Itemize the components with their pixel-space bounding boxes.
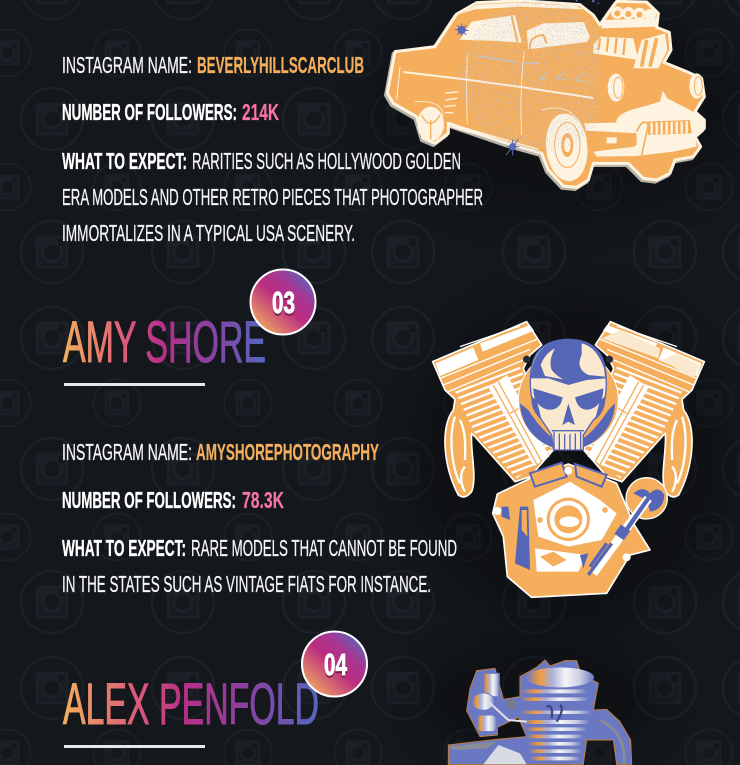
badge 04 [302,632,367,696]
what to expect: WHAT TO EXPECT: [62,148,187,174]
heading: amy shore: AMY SHORE [63,310,266,375]
engine rocker boxes [530,454,607,487]
what to expect [62,148,483,246]
carburettor [472,673,499,732]
section text: amyshorephotography [62,439,457,597]
chrome cylinder fins [520,667,594,760]
badge 03: 03 [272,287,295,322]
what to expect: RARE MODELS THAT CANNOT BE FOUND [191,535,457,561]
instagram name: AMYSHOREPHOTOGRAPHY [196,439,379,465]
car trim [397,52,593,152]
followers: NUMBER OF FOLLOWERS: [62,99,237,125]
heading: amy shore [63,310,266,386]
instagram name [62,439,379,465]
car headlights [608,73,704,102]
illustration: v-twin engine with skull [433,322,704,597]
badge 03 [250,270,316,334]
car engine blower [593,6,667,68]
engine crankcase [493,464,650,597]
heading: alex penfold [63,672,319,748]
instagram name: BEVERLYHILLSCARCLUB [197,52,364,78]
engine kickstand arm [588,478,667,575]
car paint splatter [455,0,600,160]
engine cylinders [433,322,704,497]
illustration: chrome single-cylinder engine [448,660,632,764]
instagram name: INSTAGRAM NAME: [62,52,192,78]
what to expect: WHAT TO EXPECT: [62,535,186,561]
followers: NUMBER OF FOLLOWERS: [62,487,236,513]
car grille and bumper [584,91,703,157]
what to expect: IMMORTALIZES IN A TYPICAL USA SCENERY. [62,220,355,246]
car windows [459,3,590,49]
what to expect: IN THE STATES SUCH AS VINTAGE FIATS FOR INSTANCE. [62,571,431,597]
badge 04: 04 [324,647,348,682]
what to expect: RARITIES SUCH AS HOLLYWOOD GOLDEN [192,148,461,174]
what to expect [62,535,457,597]
heading: alex penfold: ALEX PENFOLD [63,672,319,737]
followers: 78.3K [242,487,284,513]
badge 03: 03 [272,285,295,320]
followers: 214K [242,99,279,125]
badge 04: 04 [324,649,348,684]
illustration: hot rod car [386,0,704,189]
instagram name: INSTAGRAM NAME: [62,439,192,465]
car wheels [417,107,591,183]
section text: beverlyhillscarclub [62,52,483,246]
engine skull [518,339,618,450]
